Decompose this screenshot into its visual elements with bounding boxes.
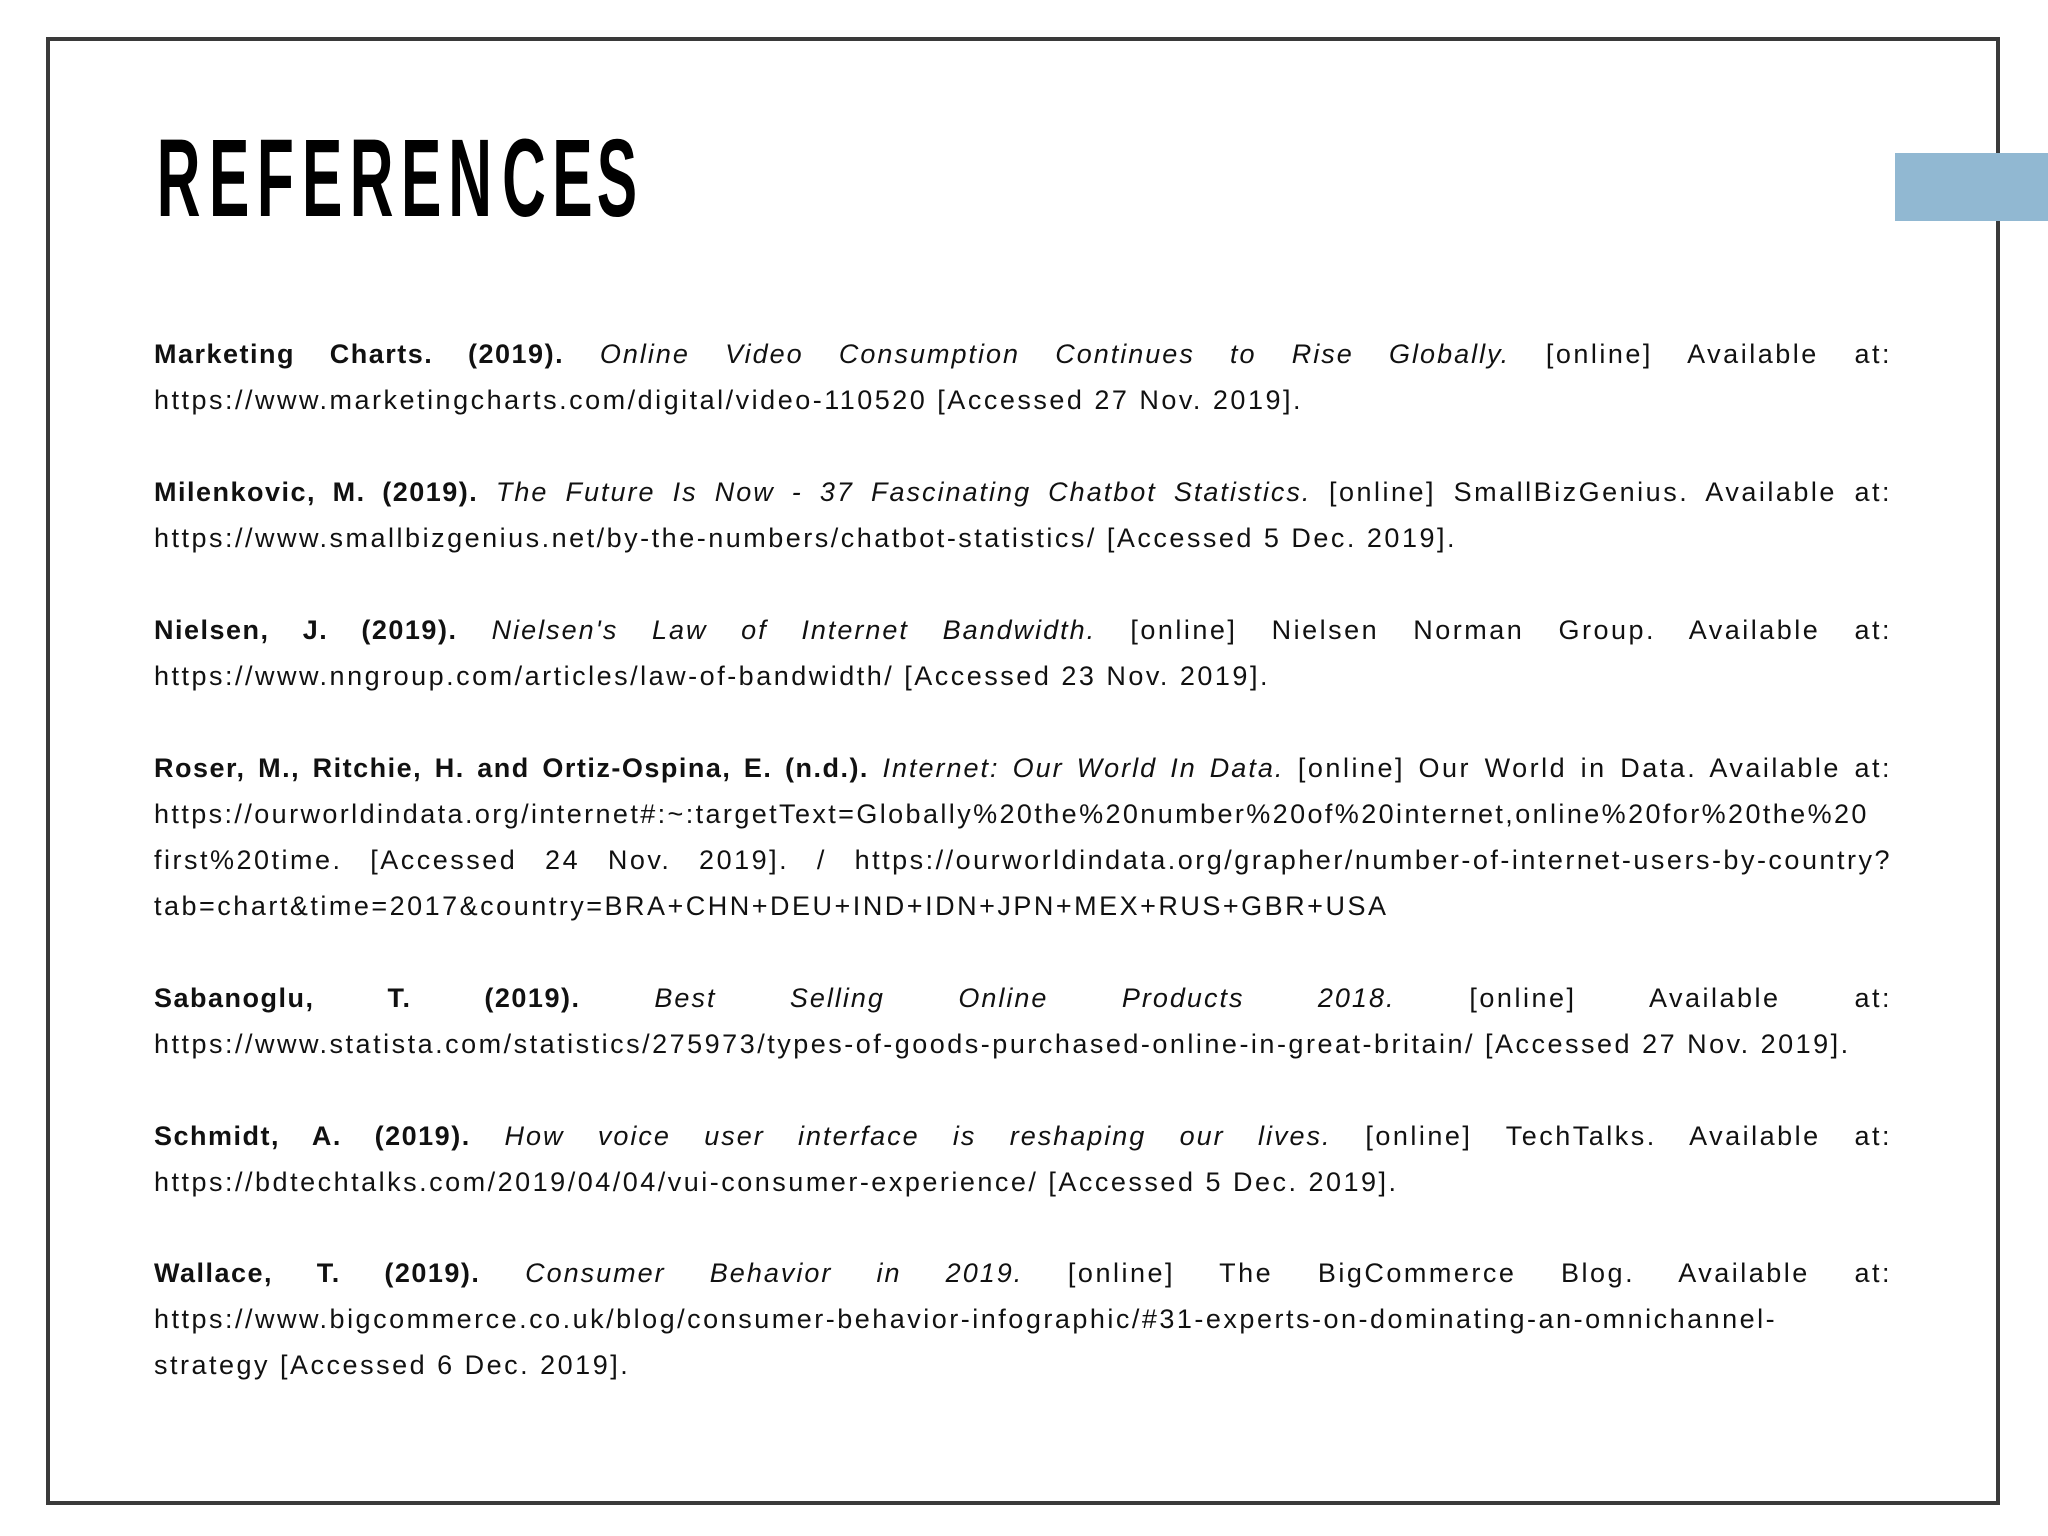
reference: Wallace: https://www.bigcommerce.co.uk/blog/consumer-behavior-infographic/#31-experts-on-dominating-an-omnichannel- [154, 1304, 1777, 1334]
reference: Schmidt: Schmidt, A. (2019). How voice user interface is reshaping our lives. [online] TechTalks. Available at: [154, 1121, 1892, 1151]
title: N [448, 117, 492, 240]
reference: Wallace: Wallace, T. (2019). Consumer Behavior in 2019. [online] The BigCommerce Blog. Available at: [154, 1258, 1892, 1288]
reference: Roser: tab=chart&time=2017&country=BRA+CHN+DEU+IND+IDN+JPN+MEX+RUS+GBR+USA [154, 891, 1388, 921]
accent tab [1895, 153, 2048, 221]
reference: Sabanoglu: Sabanoglu, T. (2019). Best Selling Online Products 2018. [online] Available at: [154, 983, 1892, 1013]
reference: Milenkovic: Milenkovic, M. (2019). The Future Is Now - 37 Fascinating Chatbot Statistics. [online] SmallBizGenius. Available at: [154, 477, 1892, 507]
reference: Nielsen: https://www.nngroup.com/articles/law-of-bandwidth/ [Accessed 23 Nov. 2019]. [154, 661, 1270, 691]
reference: Roser: Roser, M., Ritchie, H. and Ortiz-Ospina, E. (n.d.). Internet: Our World In Data. [online] Our World in Data. Available at: [154, 753, 1892, 783]
title: R [157, 117, 200, 240]
reference: Schmidt [154, 1121, 1892, 1197]
reference: Marketing Charts [154, 339, 1892, 415]
title: E [552, 117, 593, 240]
title: S [597, 117, 637, 240]
title [157, 117, 637, 240]
reference: Roser: first%20time. [Accessed 24 Nov. 2019]. / https://ourworldindata.org/grapher/number-of-internet-users-by-country? [154, 845, 1892, 875]
title: E [209, 117, 249, 240]
reference: Milenkovic [154, 477, 1892, 553]
reference: Milenkovic: https://www.smallbizgenius.net/by-the-numbers/chatbot-statistics/ [Accessed 5 Dec. 2019]. [154, 523, 1457, 553]
reference: Marketing Charts: Marketing Charts. (2019). Online Video Consumption Continues to Rise Globally. [online] Available at: [154, 339, 1892, 369]
title: F [257, 117, 294, 240]
reference: Marketing Charts: https://www.marketingcharts.com/digital/video-110520 [Accessed 27 Nov. 2019]. [154, 385, 1303, 415]
reference: Wallace [154, 1258, 1892, 1380]
reference: Schmidt: https://bdtechtalks.com/2019/04/04/vui-consumer-experience/ [Accessed 5 Dec. 2019]. [154, 1167, 1399, 1197]
title: E [401, 117, 441, 240]
reference: Nielsen: Nielsen, J. (2019). Nielsen's Law of Internet Bandwidth. [online] Nielsen Norman Group. Available at: [154, 615, 1892, 645]
reference: Nielsen [154, 615, 1892, 691]
title: C [502, 117, 546, 240]
reference: Sabanoglu: https://www.statista.com/statistics/275973/types-of-goods-purchased-online-in-great-britain/ [Accessed 27 Nov. 2019]. [154, 1029, 1851, 1059]
reference: Sabanoglu [154, 983, 1892, 1059]
title: R [350, 117, 393, 240]
reference: Roser: https://ourworldindata.org/internet#:~:targetText=Globally%20the%20number%20of%20internet,online%20for%20the%20 [154, 799, 1869, 829]
title: E [302, 117, 342, 240]
reference: Roser [154, 753, 1892, 921]
reference: Wallace: strategy [Accessed 6 Dec. 2019]. [154, 1350, 630, 1380]
